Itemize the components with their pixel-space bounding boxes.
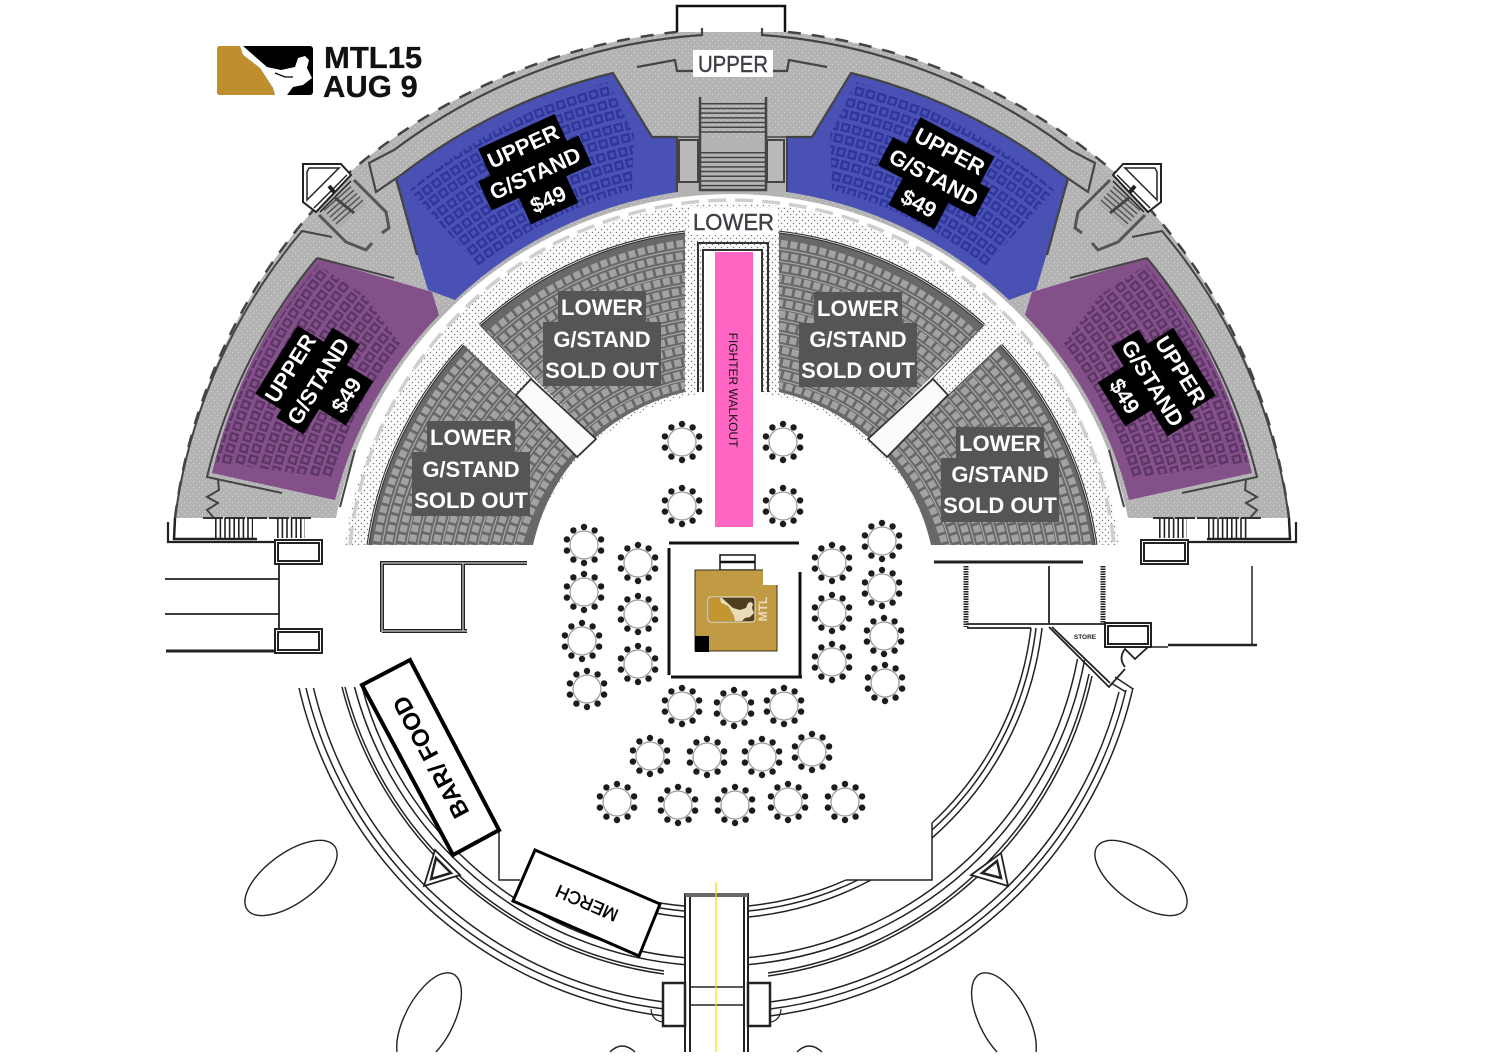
bar / food booth: BAR/ FOOD (388, 691, 475, 822)
left lower building walls (165, 518, 1296, 653)
fighting ring (695, 555, 778, 652)
outdoor planters (233, 826, 1199, 1052)
label: lower g/stand bottom right: SOLD OUT (943, 493, 1057, 518)
bar / food booth (362, 660, 499, 855)
label: lower g/stand bottom left: SOLD OUT (414, 488, 528, 513)
logo: MTL15 (324, 40, 422, 75)
label: upper g/stand purple right: G/STAND (1116, 335, 1189, 431)
lower right half: seats (372, 232, 1096, 600)
label: lower g/stand top left: G/STAND (553, 327, 651, 352)
tables (562, 421, 905, 826)
label: UPPER: UPPER (698, 51, 768, 77)
walkout corridor walls (698, 243, 768, 395)
label: lower g/stand top right: SOLD OUT (801, 358, 915, 383)
upper right half: blue and purple sections (196, 28, 1289, 600)
fighter walkout (715, 252, 753, 527)
label: upper g/stand blue right (878, 117, 995, 229)
label: LOWER: LOWER (693, 209, 774, 235)
triangle marker right (971, 853, 1008, 886)
right lower building walls (934, 540, 1257, 687)
label: upper g/stand blue left: UPPER (484, 119, 563, 174)
label: lower g/stand bottom right (941, 427, 1059, 522)
logo: AUG 9 (323, 69, 418, 104)
label: lower g/stand top right (799, 292, 917, 387)
label: lower g/stand bottom left: G/STAND (422, 457, 520, 482)
label: upper g/stand purple left: UPPER (260, 329, 321, 407)
logo (217, 40, 422, 104)
center stairs (677, 97, 787, 194)
ring frame (669, 543, 802, 677)
merch booth (513, 850, 660, 956)
label: upper g/stand purple left: $49 (326, 373, 367, 417)
upper left half: blue and purple sections (175, 28, 1268, 600)
label: lower g/stand top left: SOLD OUT (545, 358, 659, 383)
label: upper g/stand blue left: $49 (526, 180, 570, 218)
label: upper g/stand purple right: UPPER (1150, 332, 1211, 409)
label: upper g/stand blue left (478, 114, 592, 224)
lower left half: seats (366, 230, 1098, 546)
entrance walkway (651, 882, 781, 1052)
curved concourse walls (299, 628, 1133, 1016)
fighter walkout: FIGHTER WALKOUT (726, 333, 740, 448)
label: upper g/stand purple left (255, 326, 373, 434)
label: upper g/stand purple right: $49 (1104, 374, 1145, 418)
label: lower g/stand bottom left (412, 421, 530, 516)
label: upper g/stand blue right: UPPER (910, 123, 989, 180)
label: upper g/stand blue right: $49 (897, 184, 941, 223)
label: upper g/stand blue right: G/STAND (885, 144, 983, 211)
label: upper g/stand purple left: G/STAND (282, 333, 355, 429)
label: upper g/stand blue left: G/STAND (486, 142, 585, 205)
fighting ring: MTL (756, 597, 770, 621)
upper concourse bowl (175, 30, 1289, 518)
lower aisle ring (345, 200, 1119, 545)
label: lower g/stand top right: G/STAND (809, 327, 907, 352)
label: lower g/stand top left: LOWER (561, 295, 643, 320)
label: lower g/stand bottom left: LOWER (430, 425, 512, 450)
label: lower g/stand top left (543, 291, 661, 386)
label: lower g/stand top right: LOWER (817, 296, 899, 321)
label: lower g/stand bottom right: G/STAND (951, 462, 1049, 487)
top entrance outline (677, 6, 785, 32)
label: upper g/stand purple right (1098, 328, 1216, 436)
merch booth: MERCH (553, 881, 621, 925)
label: store: STORE (1074, 634, 1097, 641)
label: lower g/stand bottom right: LOWER (959, 431, 1041, 456)
triangle marker left (424, 850, 460, 886)
